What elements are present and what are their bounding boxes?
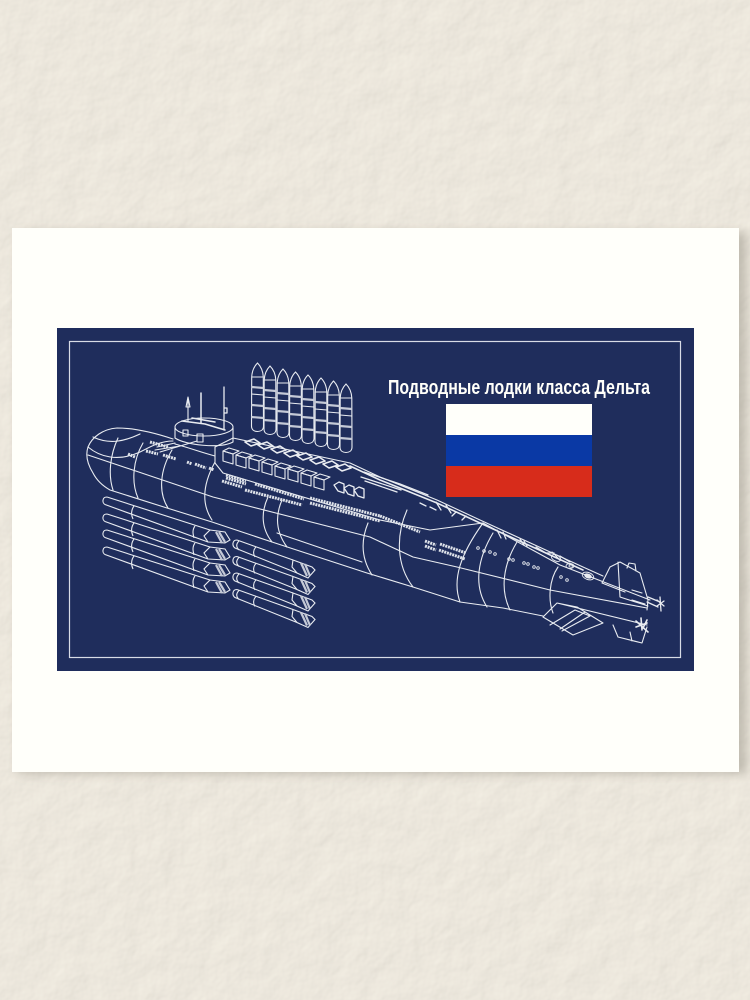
casing second edge [350,466,583,570]
torpedoes left row [103,497,230,593]
torpedoes right row [233,540,315,628]
stern shaft and upper propeller [647,597,664,611]
stern deck details [497,530,570,562]
ballistic missiles row [252,363,352,452]
hull vents and windows [128,442,466,559]
title: Подводные лодки класса Дельта [388,377,651,399]
navy blueprint panel [57,328,694,671]
masts [186,387,227,430]
hull waterline [88,455,647,608]
casing lower line [215,447,650,600]
bow inner curve [88,434,173,457]
lower dive plane [543,603,647,635]
missile hatches [223,448,330,490]
casing top line [215,438,603,576]
white paper print [12,228,739,772]
lower propeller [636,618,648,632]
aft deck details [334,472,466,520]
hull outline [87,428,543,616]
hull port circles [477,547,595,581]
paper shadow [18,232,747,774]
sail [155,418,233,456]
submarine drawing [87,387,664,643]
open hatch covers [245,439,351,471]
lower rudder [613,625,647,643]
secondary chine line [277,533,362,562]
hull frames [110,438,558,613]
upper rudder fin [602,562,648,610]
panel inner border [70,342,680,658]
russian flag [446,404,592,497]
